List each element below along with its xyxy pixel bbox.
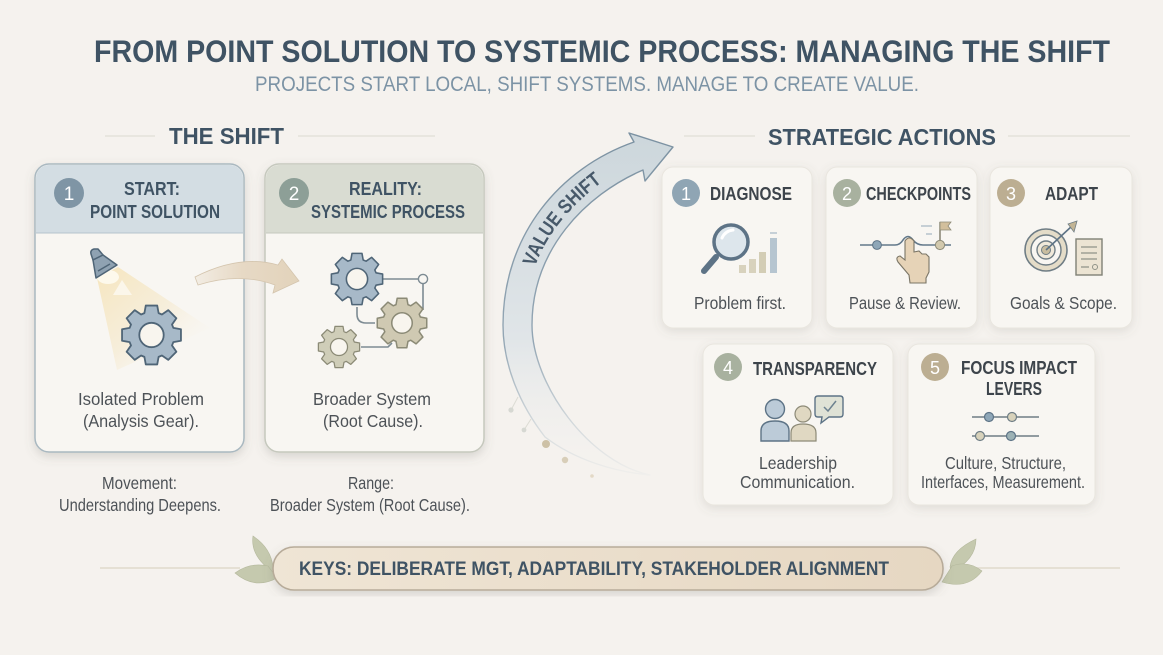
heading: ADAPT	[1045, 183, 1099, 204]
text	[740, 453, 855, 492]
card text: (Analysis Gear).	[83, 411, 199, 431]
footer line	[100, 567, 1120, 569]
subtitle: PROJECTS START LOCAL, SHIFT SYSTEMS. MANAGE TO CREATE VALUE.	[255, 72, 919, 96]
text: Interfaces, Measurement.	[921, 472, 1085, 492]
number badge 2: 2	[289, 184, 299, 205]
icon: blue gear	[331, 253, 383, 305]
badge: 1	[681, 184, 691, 204]
panel: focus impact levers	[908, 344, 1095, 505]
heading: strategic actions: STRATEGIC ACTIONS	[768, 124, 996, 150]
heading: DIAGNOSE	[710, 183, 792, 204]
header band	[266, 165, 483, 233]
card heading	[90, 178, 220, 222]
icon: right leaves	[942, 539, 982, 584]
icon: analysis gear	[122, 306, 181, 364]
badge	[997, 179, 1025, 207]
icon: timeline hand and flag	[860, 222, 951, 283]
card heading: POINT SOLUTION	[90, 201, 220, 222]
panel: start point solution	[35, 164, 244, 452]
heading: LEVERS	[986, 378, 1042, 399]
decorative particles	[508, 397, 594, 478]
card heading: SYSTEMIC PROCESS	[311, 201, 465, 222]
icon: sliders	[972, 412, 1039, 440]
card text	[313, 389, 431, 431]
arrow: value shift	[502, 132, 674, 470]
text: Problem first.	[694, 293, 786, 313]
text	[921, 453, 1085, 492]
caption: range: Range:	[348, 473, 394, 493]
badge: 4	[723, 358, 733, 378]
badge: 5	[930, 358, 940, 378]
badge	[672, 179, 700, 207]
card heading: START:	[124, 178, 180, 199]
arrow: between cards	[195, 259, 299, 293]
heading: CHECKPOINTS	[866, 183, 971, 204]
text: Leadership	[759, 453, 837, 473]
number badge 2	[279, 178, 309, 208]
icon: tan gear	[377, 298, 427, 348]
icon: magnifier and bars	[704, 225, 777, 273]
caption: range	[270, 473, 470, 515]
card heading	[311, 178, 465, 222]
heading	[961, 357, 1078, 399]
badge	[714, 353, 742, 381]
icon: lamp	[91, 249, 117, 278]
number badge 1	[54, 178, 84, 208]
badge	[921, 353, 949, 381]
caption: movement: Understanding Deepens.	[59, 495, 221, 515]
caption: range: Broader System (Root Cause).	[270, 495, 470, 515]
banner: keys	[273, 547, 943, 590]
banner text: KEYS: DELIBERATE MGT, ADAPTABILITY, STAKEHOLDER ALIGNMENT	[299, 559, 889, 580]
heading: FOCUS IMPACT	[961, 357, 1078, 378]
caption: movement: Movement:	[102, 473, 177, 493]
panel: transparency	[703, 344, 893, 505]
panel: reality systemic process	[265, 164, 484, 452]
card text	[78, 389, 204, 431]
card text: (Root Cause).	[323, 411, 423, 431]
text: Culture, Structure,	[945, 453, 1066, 473]
card text: Broader System	[313, 389, 431, 409]
heading: the shift: THE SHIFT	[169, 123, 284, 149]
text: Communication.	[740, 472, 855, 492]
panel: adapt	[990, 167, 1132, 328]
text: Pause & Review.	[849, 293, 961, 313]
badge: 3	[1006, 184, 1016, 204]
caption: movement	[59, 473, 221, 515]
arrow label: VALUE SHIFT	[522, 171, 599, 263]
icon: target and document	[1025, 221, 1102, 275]
connector lines	[357, 279, 423, 347]
card text: Isolated Problem	[78, 389, 204, 409]
panel: diagnose	[662, 167, 812, 328]
icon: small gear	[318, 326, 360, 368]
heading: TRANSPARENCY	[753, 358, 878, 379]
text: Goals & Scope.	[1010, 293, 1117, 313]
icon: people and speech bubble	[761, 396, 843, 441]
panel: checkpoints	[826, 167, 977, 328]
card heading: REALITY:	[349, 178, 422, 199]
spotlight beam	[97, 267, 210, 370]
icon: left leaves	[235, 536, 277, 583]
header band	[36, 165, 243, 233]
badge: 2	[842, 184, 852, 204]
badge	[833, 179, 861, 207]
number badge 1: 1	[64, 184, 74, 205]
